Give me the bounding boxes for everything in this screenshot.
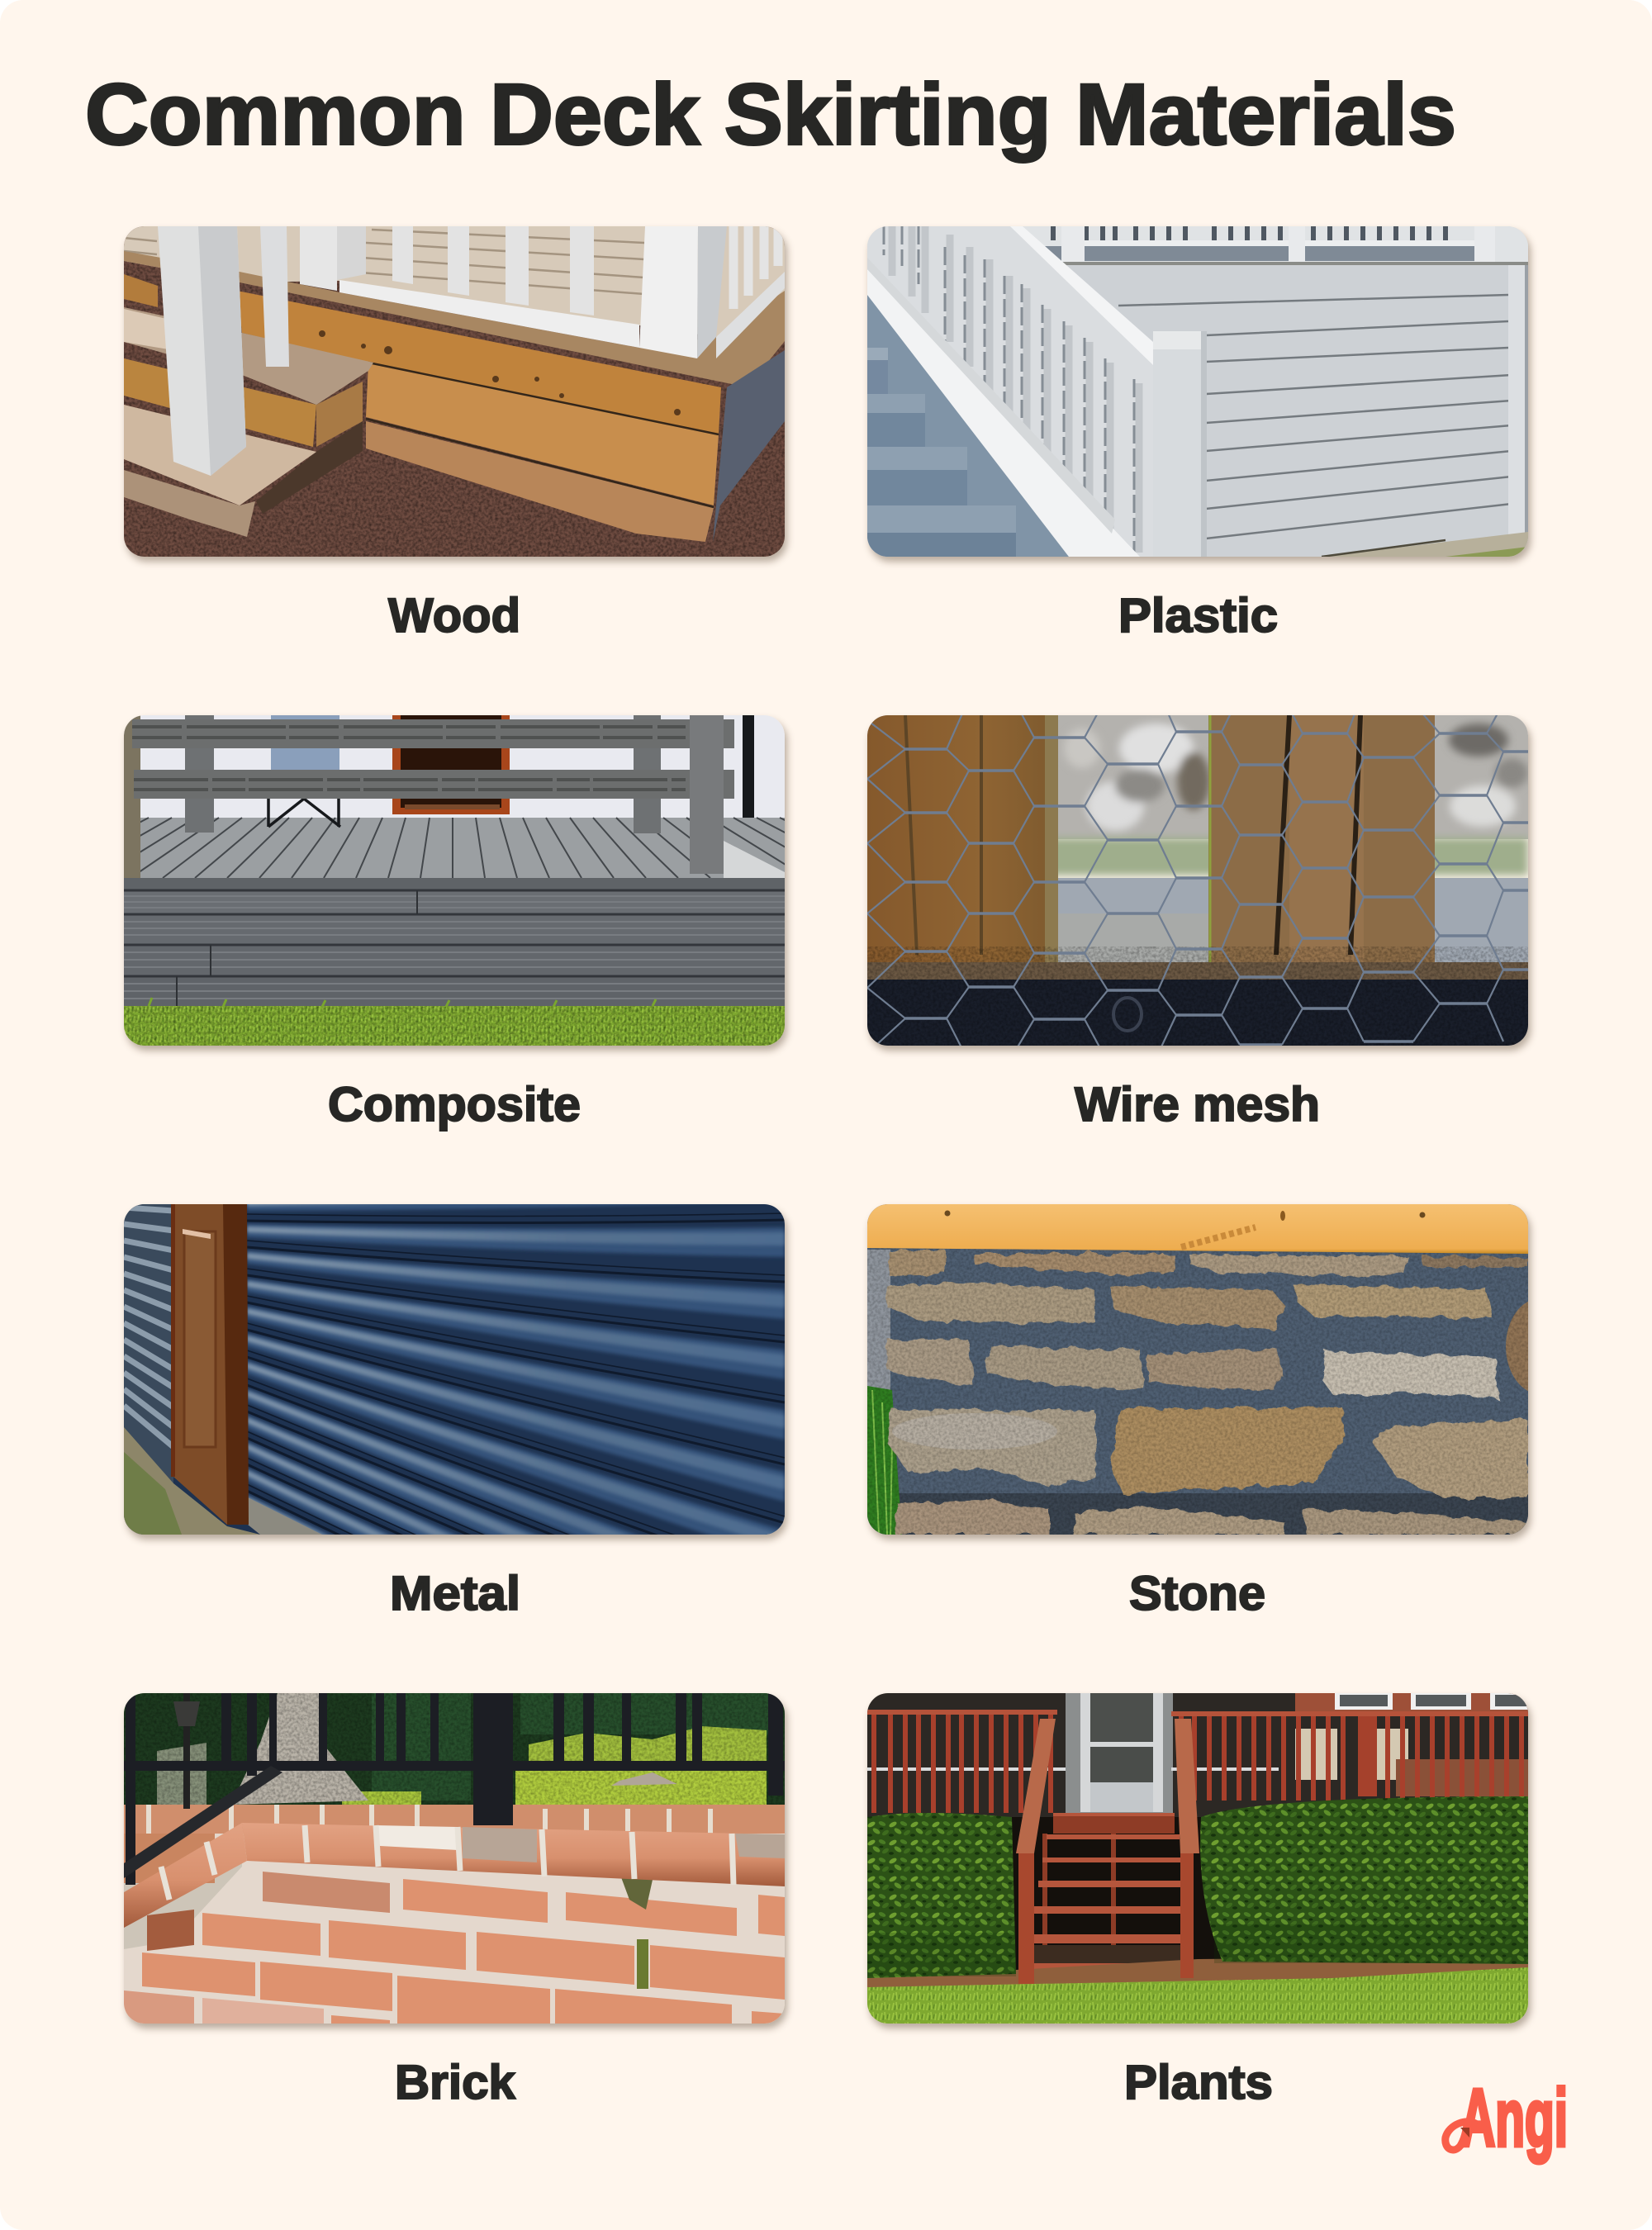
- panel: composite: [122, 715, 791, 1132]
- panel: wire mesh: [866, 715, 1535, 1132]
- label: Plastic: Plastic: [1118, 589, 1278, 643]
- photo: wood deck skirting: [124, 226, 785, 557]
- label: Wood: Wood: [388, 589, 520, 643]
- panel: brick: [122, 1693, 791, 2109]
- photo: vinyl plastic skirting: [867, 226, 1528, 557]
- photo: plants skirting: [867, 1693, 1528, 2024]
- logo: Angi: Angi: [1460, 2072, 1568, 2163]
- panel: metal: [122, 1204, 791, 1620]
- photo: wire mesh skirting: [867, 715, 1528, 1046]
- label: Metal: Metal: [390, 1567, 520, 1620]
- label: Wire mesh: Wire mesh: [1075, 1078, 1320, 1132]
- label: Brick: Brick: [395, 2056, 516, 2109]
- photo: metal roller skirting: [124, 1204, 785, 1535]
- label: Plants: Plants: [1124, 2056, 1273, 2109]
- panel: plants: [866, 1693, 1535, 2109]
- logo: Angi: [1441, 2072, 1568, 2166]
- photo: stone skirting: [867, 1204, 1528, 1535]
- photo: composite deck skirting: [124, 715, 785, 1046]
- label: Composite: Composite: [328, 1078, 581, 1132]
- panel: plastic: [866, 226, 1535, 643]
- panel: wood: [122, 226, 791, 643]
- label: Stone: Stone: [1129, 1567, 1265, 1620]
- panel: stone: [866, 1204, 1535, 1620]
- photo: brick skirting: [124, 1693, 785, 2024]
- title: Common Deck Skirting Materials: [85, 66, 1456, 164]
